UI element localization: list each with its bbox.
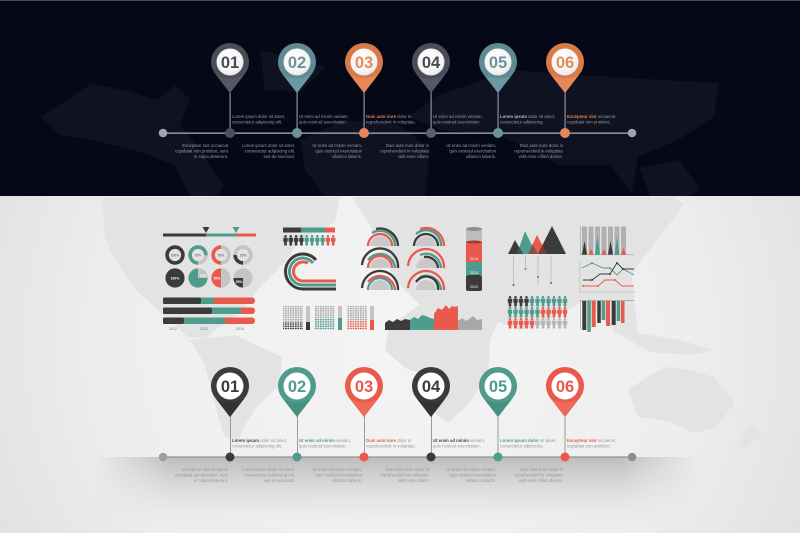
world map: dark section [41, 50, 719, 196]
marker 01 top: Excepteur sint occaecat [182, 143, 229, 148]
marker 02 bottom: quis nostrud exercitation. [299, 444, 347, 448]
start node [159, 453, 167, 461]
marker 01 bottom: Lorem ipsum [232, 438, 259, 443]
chart: stacked cylinder: 2013 [470, 271, 478, 275]
bottom timeline [159, 453, 636, 461]
chart: stacked year bars [163, 298, 255, 331]
marker 05 bottom: sit amet, [539, 438, 556, 443]
marker 02 top: consectetur adipiscing elit, [245, 149, 295, 154]
dark header band [0, 0, 800, 196]
marker 06 top [514, 43, 616, 159]
end node [628, 453, 636, 461]
chart: hanging bars [580, 300, 634, 332]
marker 04 bottom: quis nostrud exercitation. [433, 444, 481, 448]
marker 02 top: Ut enim ad minim veniam, [299, 114, 349, 119]
marker 01 top [175, 43, 285, 159]
chart: stacked cylinder: 2012 [470, 285, 478, 289]
marker 04 top: quis nostrud exercitation. [433, 120, 481, 125]
chart: stacked cylinder [466, 227, 482, 291]
ground shadow [108, 457, 685, 506]
marker 02 top: sed do eiusmod. [263, 154, 295, 159]
chart: line chart [580, 262, 636, 292]
marker 03 bottom: Ut enim ad minim veniam, [312, 467, 362, 472]
marker 02 bottom [242, 367, 351, 483]
marker 06 bottom: Excepteur sint [567, 438, 597, 443]
marker 06 top: Excepteur sint [567, 114, 597, 119]
marker 04 top [380, 43, 483, 159]
marker 03 bottom: ullamco laboris. [332, 478, 362, 483]
marker 01 bottom: consectetur adipiscing elit. [232, 444, 282, 448]
marker 05 bottom: 05 [489, 378, 507, 396]
chart: pie percentages: 50% [214, 276, 220, 280]
marker 03 bottom: dolor in [396, 438, 412, 443]
marker 03 bottom: 03 [355, 378, 373, 396]
marker 06 top: Duis aute irure dolor in [520, 143, 564, 148]
marker 03 top [312, 43, 416, 159]
marker 05 top: Ut enim ad minim veniam, [446, 143, 496, 148]
marker 03 top: quis nostrud exercitation [315, 149, 363, 154]
marker 05 bottom: ullamco laboris. [466, 478, 496, 483]
marker 03 top: 03 [355, 54, 373, 72]
marker 06 bottom: reprehenderit in voluptate [514, 473, 564, 478]
marker 02 bottom: veniam, [335, 438, 351, 443]
marker 01 bottom: cupidatat non proident, sunt [175, 473, 229, 478]
chart: donut percentages [167, 247, 251, 263]
marker 06 bottom: occaecat [597, 438, 616, 443]
marker 05 top: 05 [489, 54, 507, 72]
marker 06 bottom [514, 367, 616, 483]
chart: donut percentages: 100% [171, 253, 179, 257]
marker 01 top: consectetur adipiscing elit. [232, 120, 282, 125]
start node [159, 129, 167, 137]
marker 02 bottom: sed do eiusmod. [263, 478, 295, 483]
marker 03 bottom [312, 367, 416, 483]
marker 01 bottom: Excepteur sint occaecat [182, 467, 229, 472]
marker 05 top: dolor sit amet, [527, 114, 555, 119]
chart: area blocks [385, 305, 482, 330]
chart: dot grid 2 [315, 306, 342, 330]
marker 04 bottom: veniam, [469, 438, 485, 443]
marker 02 bottom: Lorem ipsum dolor sit amet, [242, 467, 295, 472]
marker 04 top: Duis aute irure dolor in [386, 143, 430, 148]
chart: people ratio bar [283, 228, 335, 246]
marker 03 top: dolor in [396, 114, 412, 119]
chart: donut percentages: 50% [218, 253, 224, 257]
marker 05 top: consectetur adipiscing. [500, 120, 544, 125]
marker 03 bottom: reprehenderit in voluptate. [366, 444, 416, 448]
marker 06 top: velit esse cillum dolore. [519, 154, 563, 159]
marker 04 top: 04 [422, 54, 441, 72]
chart: pie percentages: 75% [200, 274, 206, 278]
marker 01 bottom [175, 367, 287, 483]
marker 03 top: Duis aute irure [366, 114, 397, 119]
chart: stacked cylinder: 2014 [470, 257, 478, 261]
chart: dot grid 1 [283, 306, 310, 330]
chart: stacked year bars: 2012 [169, 327, 177, 331]
top timeline [159, 129, 636, 137]
marker 01 top: Lorem ipsum dolor sit amet, [232, 114, 285, 119]
chart: people grid [508, 296, 567, 328]
marker 05 top: Lorem ipsum [500, 114, 527, 119]
marker 01 bottom: dolor sit amet, [259, 438, 287, 443]
marker 05 top: ullamco laboris. [466, 154, 496, 159]
marker 04 bottom [380, 367, 485, 483]
world map: light section [102, 197, 762, 448]
chart: stacked year bars: 2014 [236, 327, 244, 331]
marker 03 bottom: quis nostrud exercitation [315, 473, 363, 478]
marker 04 top: reprehenderit in voluptate [380, 149, 430, 154]
marker 04 bottom: Ut enim ad minim [433, 438, 469, 443]
chart: spike columns [580, 226, 634, 255]
chart: concentric track [286, 254, 336, 289]
marker 04 top: velit esse cillum. [398, 154, 429, 159]
marker 02 top [242, 43, 349, 159]
light background [0, 196, 800, 533]
chart: pie percentages [165, 268, 253, 288]
marker 04 bottom: reprehenderit in voluptate [380, 473, 430, 478]
marker 06 top: occaecat [597, 114, 616, 119]
marker 06 bottom: Duis aute irure dolor in [520, 467, 564, 472]
marker 05 top: quis nostrud exercitation [449, 149, 497, 154]
marker 03 top: ullamco laboris. [332, 154, 362, 159]
marker 06 top: reprehenderit in voluptate [514, 149, 564, 154]
chart: marker bar [163, 227, 256, 236]
marker 05 bottom: Lorem ipsum dolor [500, 438, 539, 443]
marker 01 bottom: in culpa deserunt. [194, 478, 228, 483]
chart: semicircle gauges left [362, 229, 398, 290]
marker 03 top: Ut enim ad minim veniam, [312, 143, 362, 148]
marker 04 bottom: velit esse cillum. [398, 478, 429, 483]
marker 01 top: in culpa deserunt. [194, 154, 228, 159]
marker 06 bottom: 06 [556, 378, 574, 396]
marker 04 bottom: 04 [422, 378, 441, 396]
marker 05 bottom: Ut enim ad minim veniam, [446, 467, 496, 472]
marker 04 top: Ut enim ad minim veniam, [433, 114, 483, 119]
marker 05 bottom [446, 367, 556, 483]
timeline axis [163, 456, 632, 458]
timeline axis [163, 132, 632, 134]
marker 02 bottom: consectetur adipiscing elit, [245, 473, 295, 478]
marker 04 bottom: Duis aute irure dolor in [386, 467, 430, 472]
marker 03 top: reprehenderit in voluptate. [366, 120, 416, 125]
marker 05 bottom: consectetur adipiscing. [500, 444, 544, 448]
marker 02 top: quis nostrud exercitation. [299, 120, 347, 125]
chart: dot grid 3 [347, 306, 374, 330]
marker 05 bottom: quis nostrud exercitation [449, 473, 497, 478]
marker 02 top: 02 [288, 54, 306, 72]
marker 01 top: cupidatat non proident, sunt [175, 149, 229, 154]
chart: stacked year bars: 2013 [200, 327, 208, 331]
marker 06 bottom: velit esse cillum dolore. [519, 478, 563, 483]
marker 01 top: 01 [221, 54, 239, 72]
marker 01 bottom: 01 [221, 378, 239, 396]
marker 05 top [446, 43, 555, 159]
chart: pie percentages: 100% [171, 276, 179, 280]
chart: donut percentages: 25% [240, 253, 246, 257]
marker 02 bottom: 02 [288, 378, 306, 396]
chart: donut percentages: 75% [195, 253, 201, 257]
marker 02 bottom: Ut enim ad minim [299, 438, 335, 443]
end node [628, 129, 636, 137]
chart: pie percentages: 25% [236, 280, 242, 284]
marker 06 top: 06 [556, 54, 574, 72]
marker 02 top: Lorem ipsum dolor sit amet, [242, 143, 295, 148]
marker 06 top: cupidatat non proident. [567, 120, 611, 125]
chart: mountain triangles [508, 226, 566, 286]
marker 06 bottom: cupidatat non proident. [567, 444, 611, 448]
chart: semicircle gauges right [408, 228, 444, 290]
marker 03 bottom: Duis aute irure [366, 438, 397, 443]
